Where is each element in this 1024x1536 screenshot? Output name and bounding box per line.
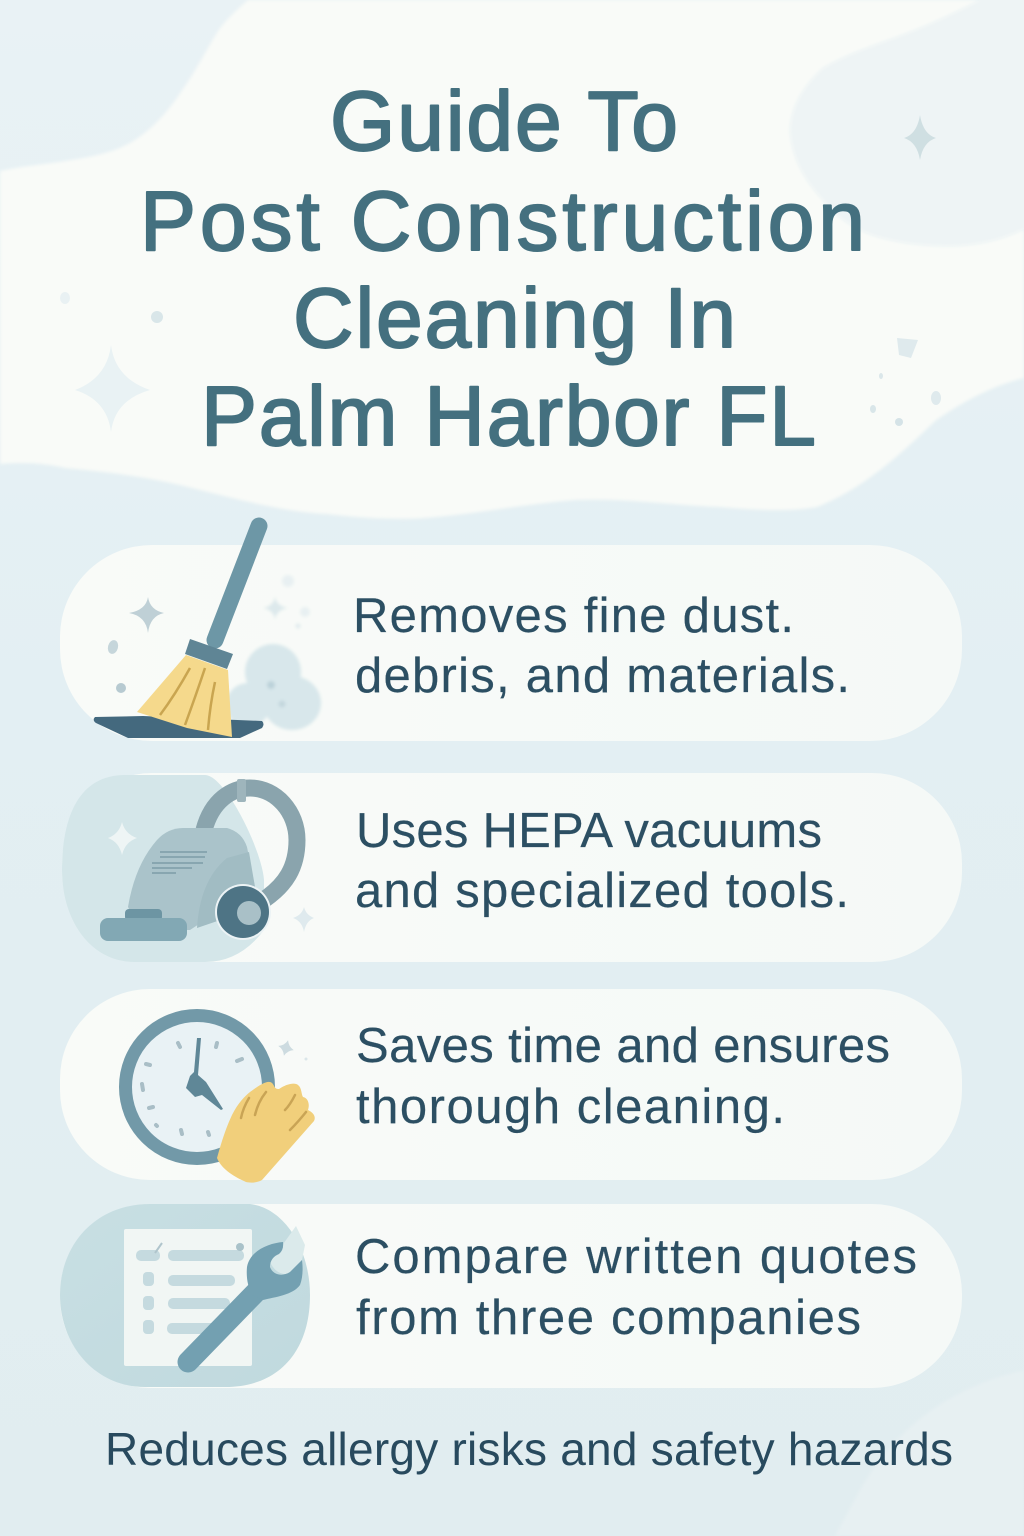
text: removes fine dust: Removes fine dust. [353, 589, 794, 643]
text: HEPA vacuums: Uses HEPA vacuums [356, 804, 822, 858]
title [140, 74, 865, 463]
footer text: Reduces allergy risks and safety hazards [105, 1423, 953, 1475]
background sparkles and dust [60, 115, 941, 432]
text: compare quotes [355, 1230, 917, 1345]
panel: removes fine dust [60, 526, 962, 741]
text: compare quotes: Compare written quotes [355, 1230, 917, 1284]
text: HEPA vacuums [355, 804, 849, 918]
title: Post Construction [140, 174, 865, 268]
icon: vacuum [62, 775, 314, 962]
text: saves time: Saves time and ensures [356, 1019, 890, 1073]
title: Guide To [330, 74, 678, 168]
title: Palm Harbor FL [201, 369, 816, 463]
text: saves time [356, 1019, 890, 1134]
text: saves time: thorough cleaning. [356, 1080, 785, 1134]
panel: compare quotes [60, 1204, 962, 1388]
panel: saves time [60, 989, 962, 1183]
panel: HEPA vacuums [62, 773, 962, 962]
text: removes fine dust [353, 589, 850, 703]
title: Cleaning In [293, 271, 736, 365]
icon: checklist and wrench [60, 1204, 310, 1387]
text: removes fine dust: debris, and materials. [355, 649, 850, 703]
text: compare quotes: from three companies [356, 1291, 861, 1345]
icon: broom [94, 526, 321, 738]
icon: clock and glove [126, 1016, 315, 1183]
text: HEPA vacuums: and specialized tools. [355, 864, 849, 918]
